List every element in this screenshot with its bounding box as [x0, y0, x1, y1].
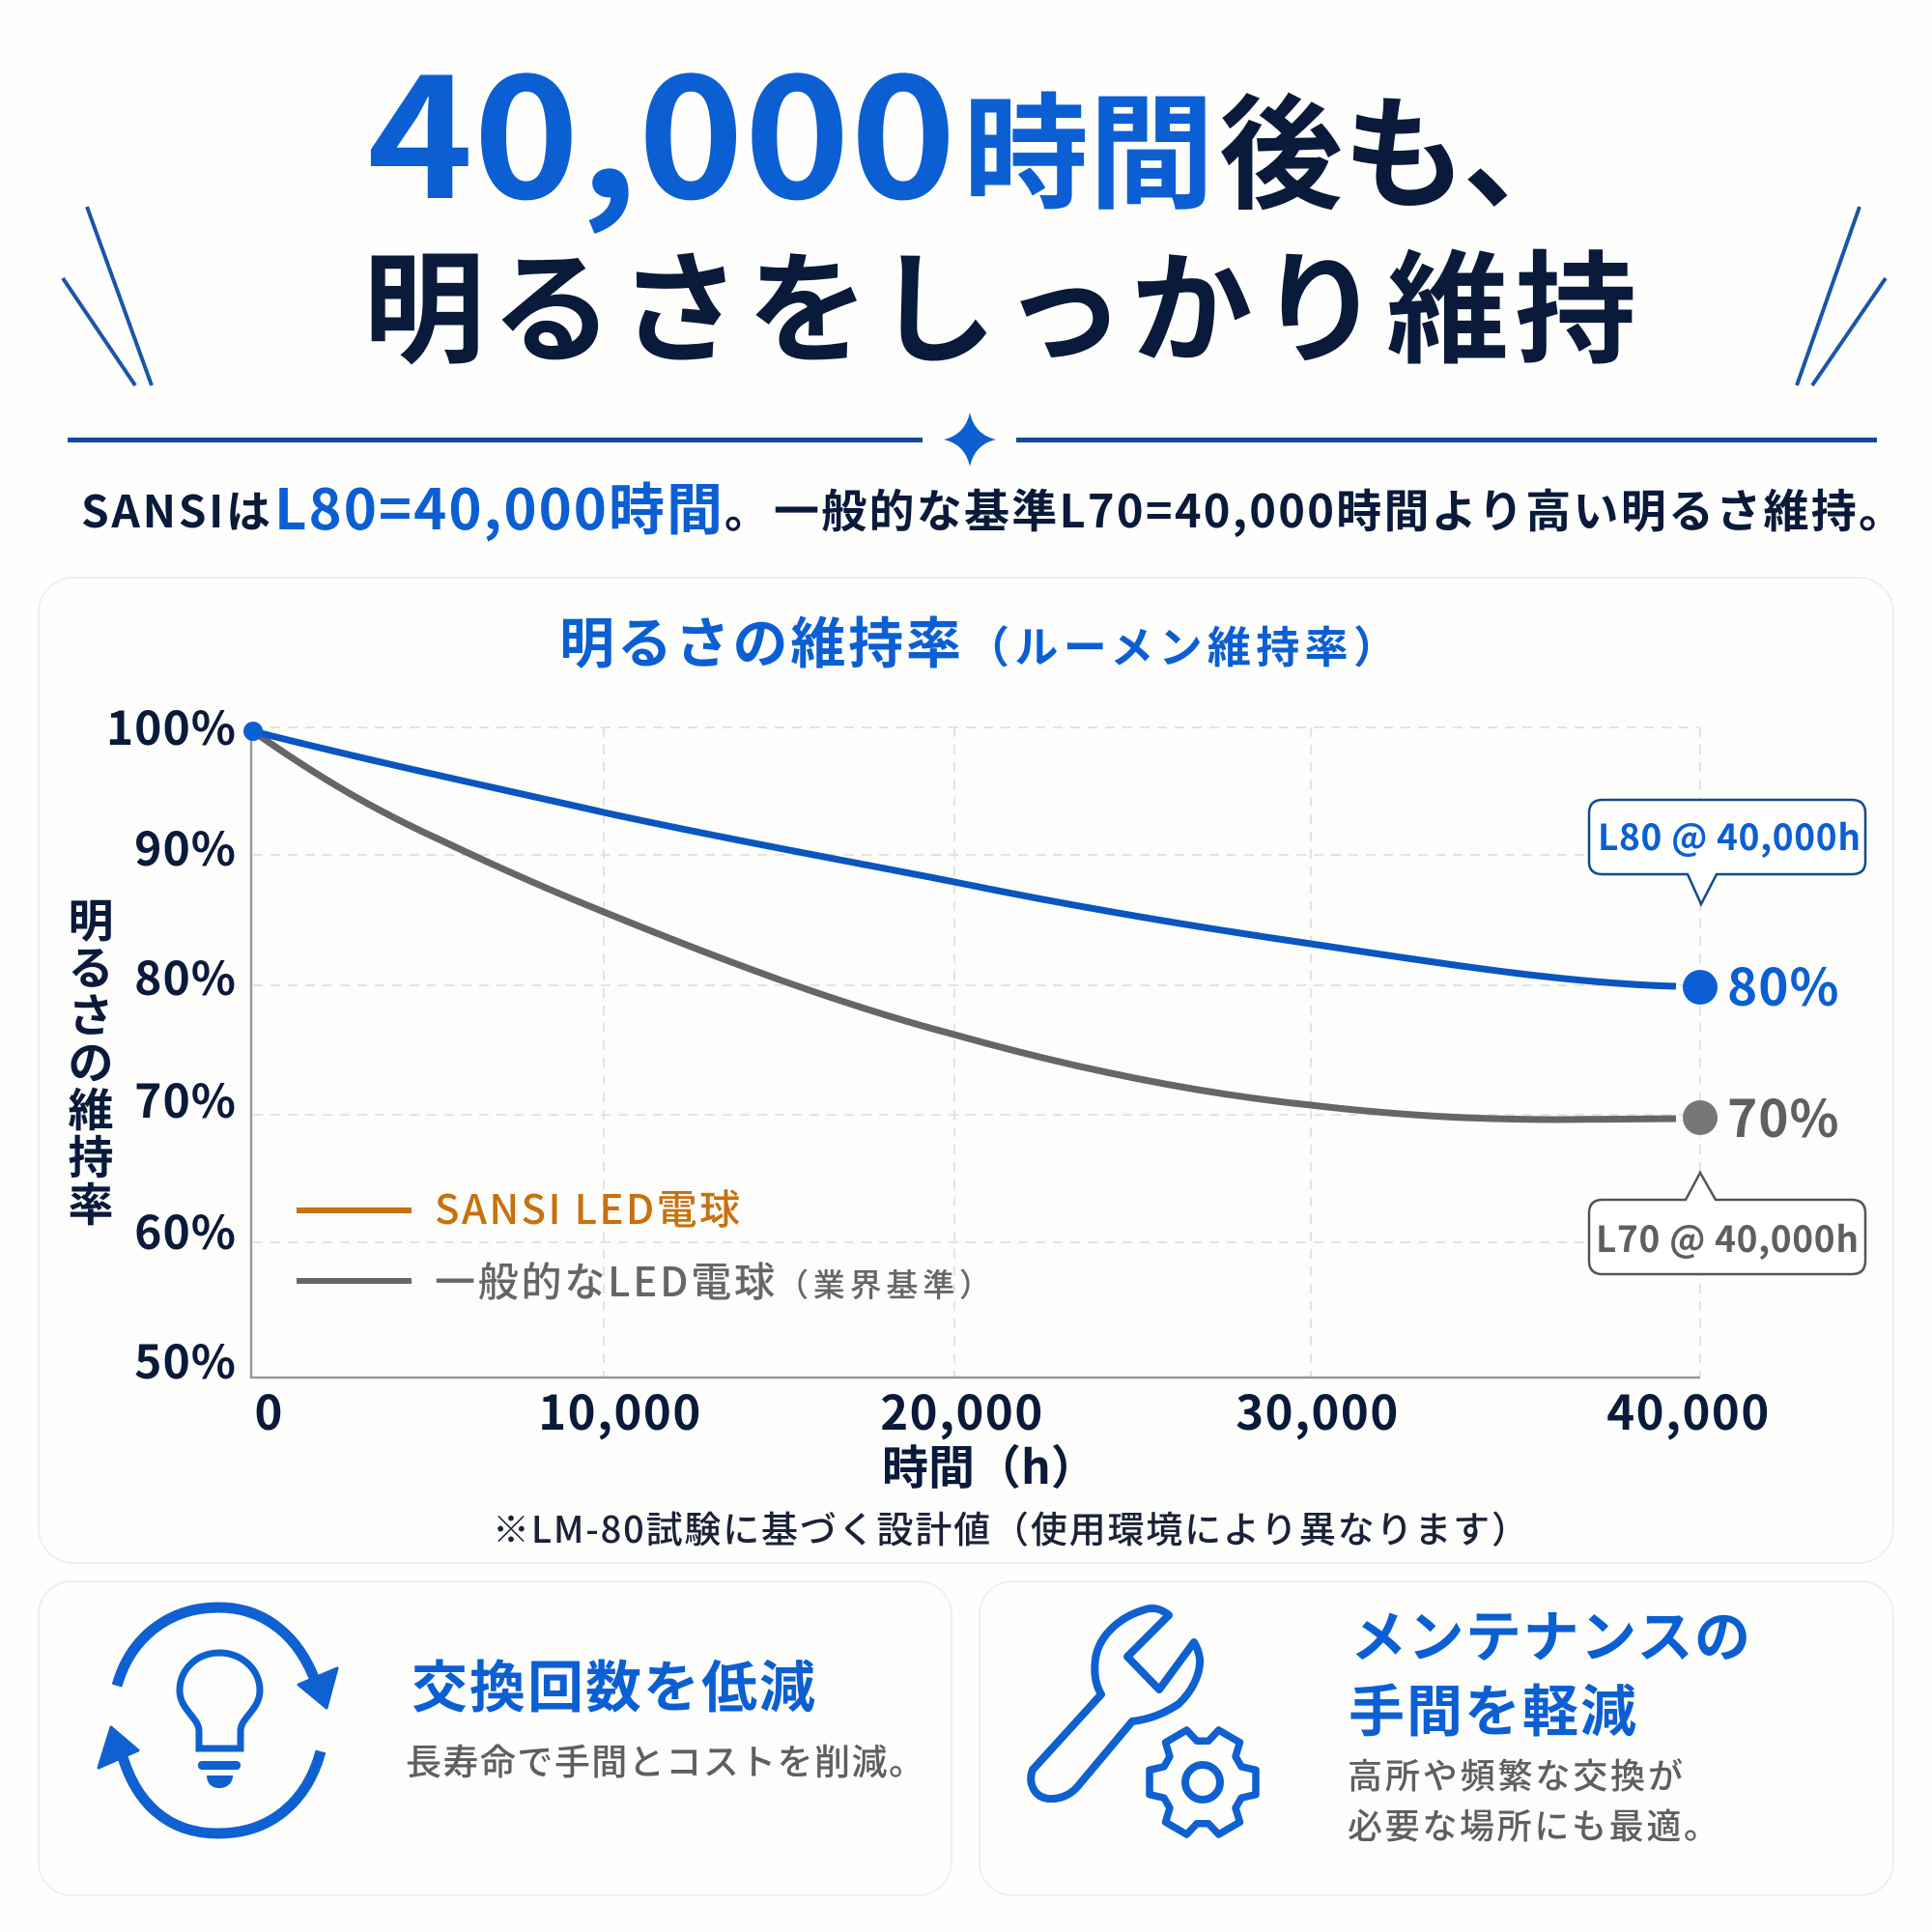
x axis labels: [255, 1376, 1771, 1444]
value label 80%: 80%: [1727, 948, 1840, 1021]
callout: L80: [1589, 800, 1865, 904]
divider with star: [68, 412, 1877, 467]
y axis title: 持: [68, 1121, 114, 1187]
title: [363, 5, 1636, 388]
decorative burst lines left: [63, 207, 152, 385]
title: 明るさをしっかり維持: [363, 213, 1636, 388]
decorative burst lines right: [1797, 207, 1886, 385]
legend: （業界基準）: [777, 1260, 991, 1306]
heading: 手間を軽減: [1349, 1666, 1636, 1747]
chart title: （ルーメン維持率）: [966, 612, 1397, 675]
heading: メンテナンスの: [1350, 1592, 1750, 1673]
x axis labels: 20,000: [880, 1376, 1044, 1444]
value label 70%: 70%: [1727, 1079, 1840, 1152]
icon: wrench and gear: [1031, 1608, 1256, 1834]
x axis labels: 40,000: [1606, 1376, 1771, 1444]
y axis title: 率: [68, 1168, 114, 1235]
title: 後も、: [1219, 55, 1586, 234]
y axis labels: 60%: [134, 1195, 237, 1263]
chart title: [559, 600, 1397, 679]
axes: [251, 729, 1700, 1378]
subtitle: SANSIは: [81, 477, 270, 541]
description: [1348, 1748, 1719, 1849]
y axis title: 明: [68, 884, 114, 951]
heading: 交換回数を低減: [412, 1642, 815, 1723]
heading: [1349, 1592, 1750, 1747]
end marker: SANSI: [1683, 970, 1718, 1005]
line: general LED: [253, 731, 1676, 1120]
legend: [297, 1178, 991, 1309]
y axis labels: 90%: [134, 811, 237, 879]
panel: chart: [39, 578, 1893, 1563]
title: 時間: [963, 53, 1214, 235]
subtitle: 。: [724, 477, 769, 541]
x axis title: 時間（h）: [882, 1430, 1097, 1497]
chart title: 明るさの維持率: [559, 600, 961, 679]
y axis labels: 100%: [106, 691, 237, 758]
y axis labels: 70%: [134, 1064, 237, 1131]
callout: L80: L80 @ 40,000h: [1598, 809, 1861, 861]
footnote: ※LM-80試験に基づく設計値（使用環境により異なります）: [493, 1500, 1528, 1553]
title: 40,000: [367, 5, 956, 246]
x axis labels: 30,000: [1236, 1376, 1400, 1444]
icon: bulb with cycle arrows: [99, 1607, 337, 1833]
grid lines: [253, 727, 1700, 1377]
x axis labels: 10,000: [538, 1376, 702, 1444]
y axis labels: 80%: [134, 941, 237, 1009]
y axis title: 維: [68, 1073, 114, 1140]
panel: less maintenance: [980, 1581, 1893, 1895]
description: 必要な場所にも最適。: [1348, 1799, 1719, 1849]
x axis labels: 0: [255, 1376, 282, 1444]
description: 長寿命で手間とコストを削減。: [406, 1733, 924, 1785]
start marker: [243, 722, 263, 741]
description: 高所や頻繁な交換が: [1348, 1748, 1683, 1799]
y axis labels: 50%: [134, 1324, 237, 1392]
callout: L70: [1589, 1173, 1865, 1274]
subtitle: 一般的な基準L70=40,000時間より高い明るさ維持。: [774, 474, 1904, 541]
legend: 一般的なLED電球: [435, 1250, 775, 1309]
y axis title: さ: [68, 979, 114, 1045]
legend: SANSI LED電球: [435, 1178, 740, 1236]
line: SANSI LED: [253, 731, 1676, 986]
y axis title: の: [68, 1026, 114, 1093]
y axis labels: [106, 691, 237, 1392]
subtitle: L80=40,000時間: [274, 465, 723, 546]
callout: L70: L70 @ 40,000h: [1596, 1210, 1859, 1263]
panel: fewer replacements: [39, 1581, 952, 1895]
y axis title: る: [68, 931, 114, 998]
end marker: general: [1683, 1100, 1718, 1135]
subtitle: [81, 465, 1904, 546]
